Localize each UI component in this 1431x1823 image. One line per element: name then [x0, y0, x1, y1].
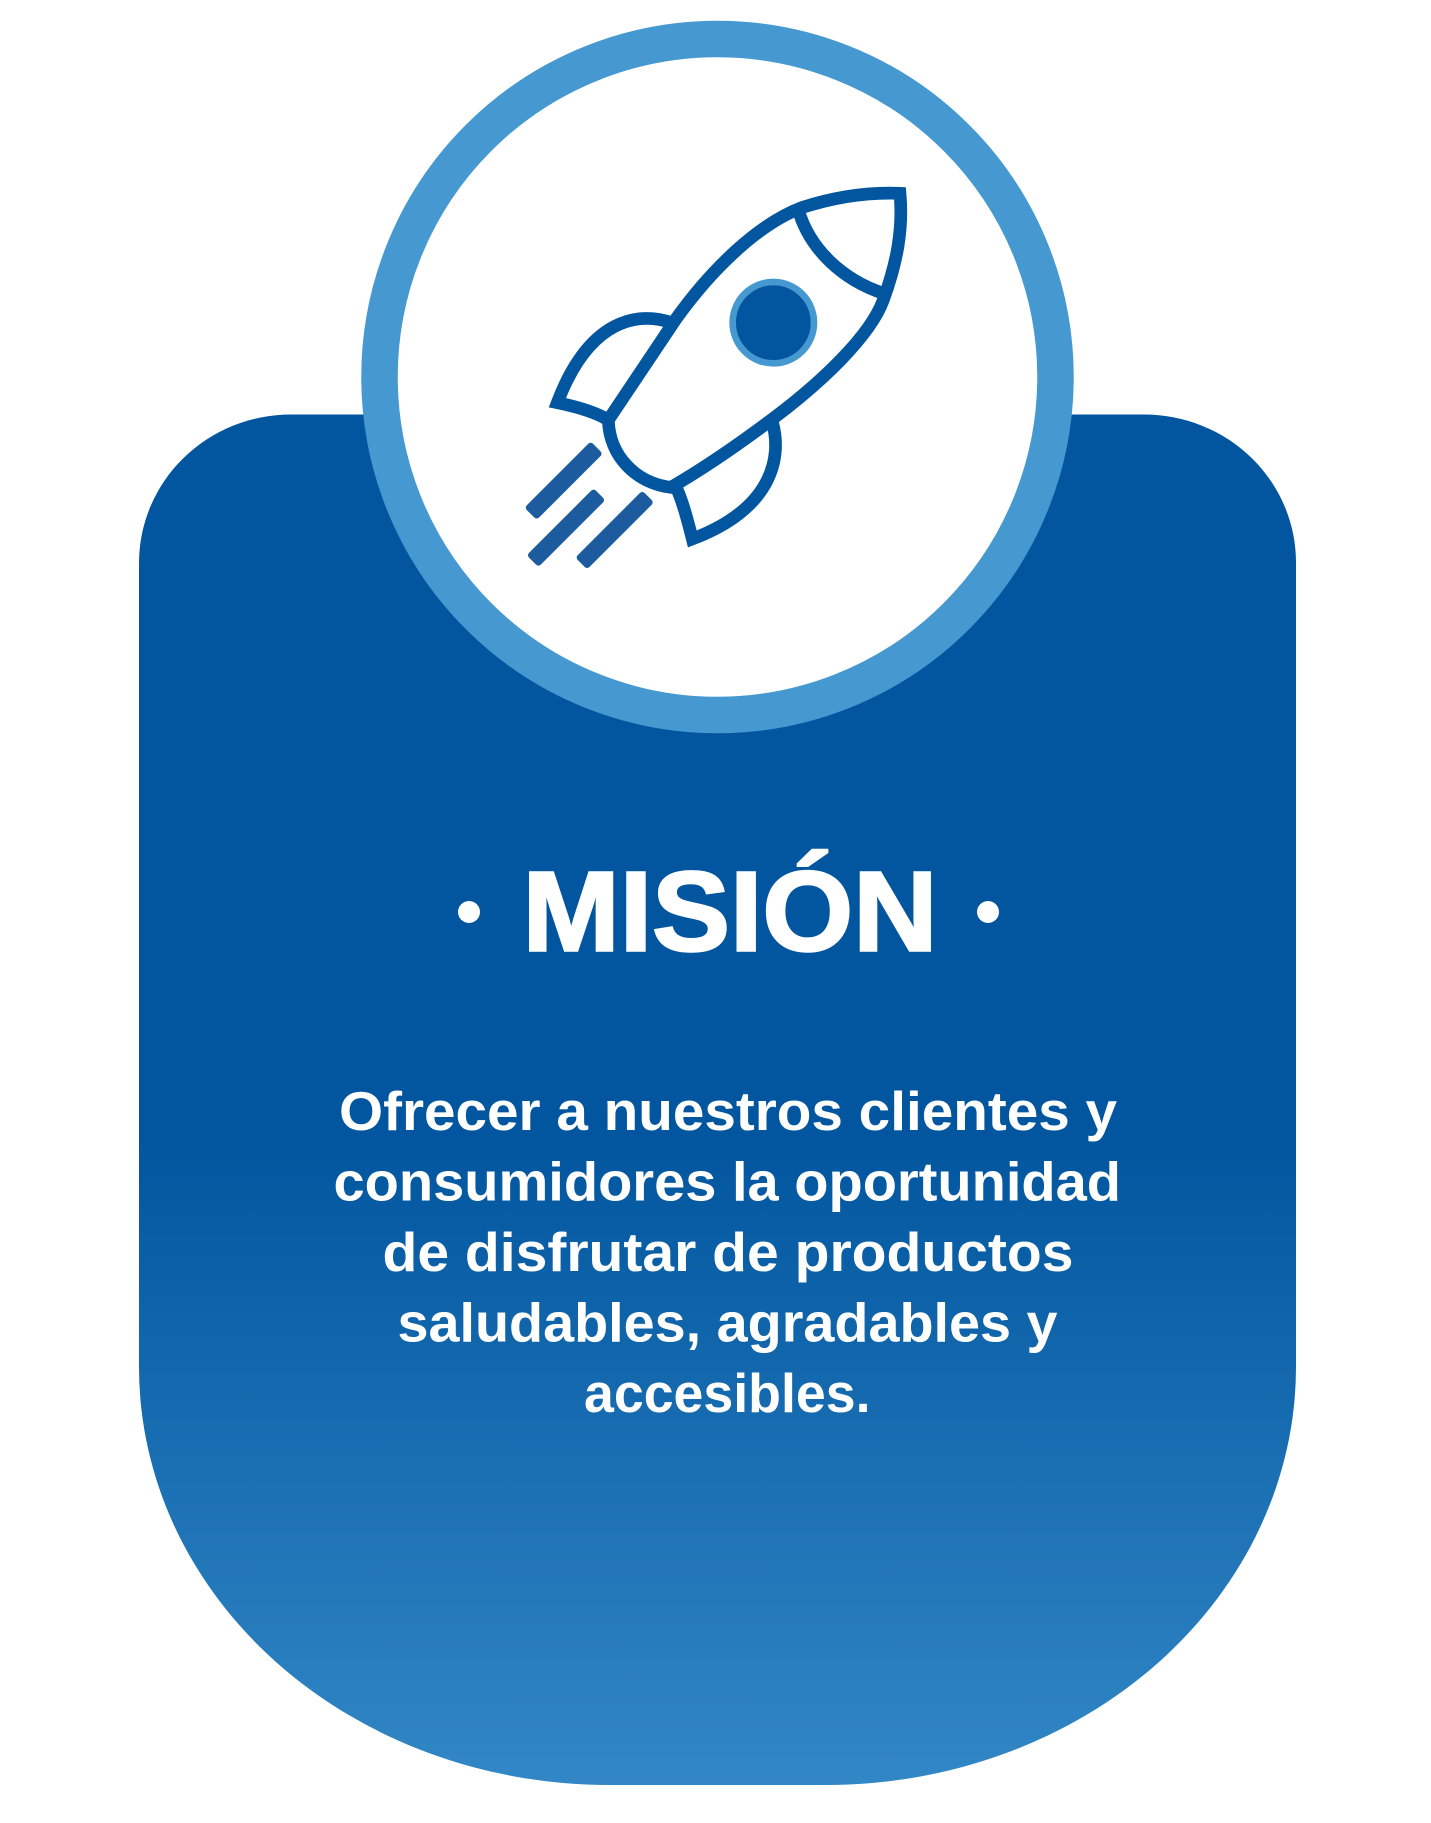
title text: MISIÓN	[522, 848, 938, 974]
rocket nose line	[798, 210, 883, 293]
circle badge	[380, 39, 1056, 715]
exhaust streaks	[524, 441, 654, 569]
mission text block: consumidores la oportunidad	[334, 1150, 1121, 1212]
title dot left	[458, 901, 480, 923]
rocket left fin	[557, 318, 672, 420]
mission text block: Ofrecer a nuestros clientes y	[339, 1080, 1117, 1142]
rocket window	[733, 282, 814, 363]
mission text block: accesibles.	[584, 1362, 870, 1424]
title	[458, 848, 999, 974]
title dot right	[977, 901, 999, 923]
rocket body	[608, 193, 901, 487]
icon: rocket	[524, 193, 901, 569]
mission text block	[334, 1080, 1121, 1424]
rocket right fin	[677, 423, 776, 539]
mission text block: saludables, agradables y	[398, 1292, 1058, 1354]
mission text block: de disfrutar de productos	[382, 1221, 1074, 1283]
panel: blue card	[139, 414, 1296, 1785]
